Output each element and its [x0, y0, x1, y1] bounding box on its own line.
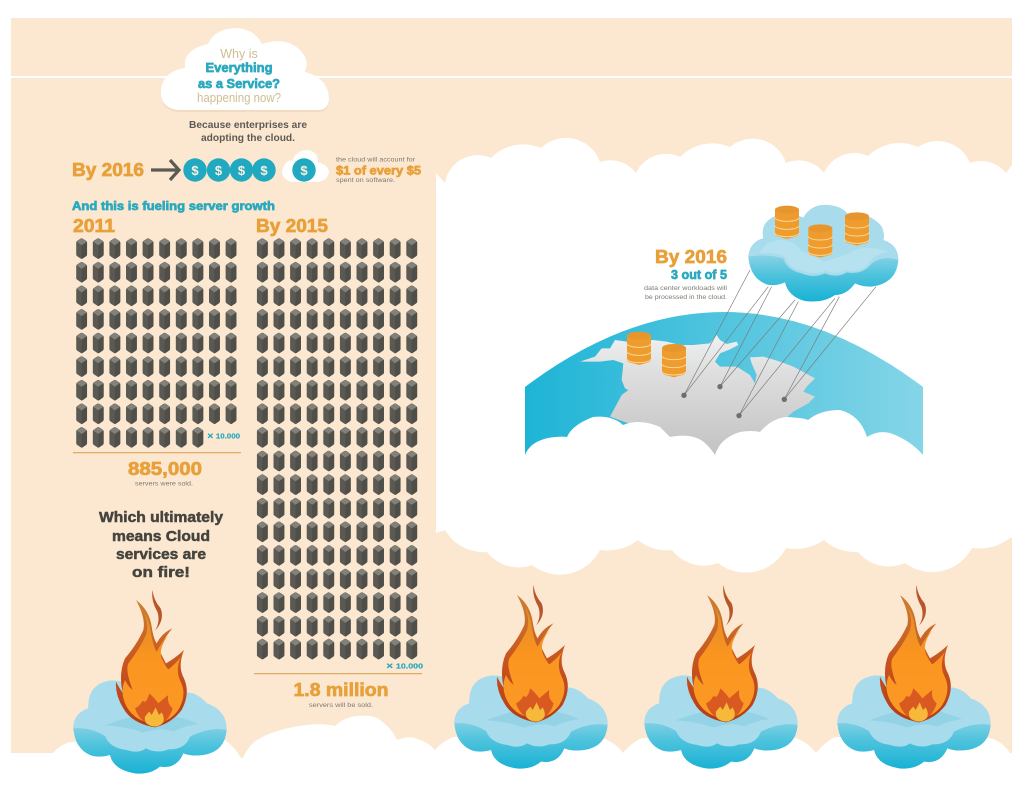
text: cloud services on fire: services are	[116, 546, 206, 563]
cloud share text: the cloud will account for	[336, 156, 416, 164]
icon: coins	[183, 158, 276, 182]
cloud share text	[336, 156, 421, 184]
server growth heading: And this is fueling server growth	[72, 199, 275, 213]
title text: Why is	[220, 47, 258, 61]
horizontal white band	[11, 76, 1012, 78]
text: cloud services on fire	[99, 509, 224, 581]
server stacks on map	[627, 332, 686, 377]
white clouds over globe	[525, 410, 923, 470]
text: workloads caption: data center workloads will	[644, 285, 728, 292]
globe illustration	[525, 270, 923, 470]
heading: 2011: 2011	[73, 216, 115, 236]
chart: 2015 servers	[257, 238, 417, 660]
connection lines	[684, 270, 876, 416]
cloud share text: $1 of every $5	[336, 164, 421, 178]
title text	[197, 47, 281, 105]
text: cloud services on fire: means Cloud	[112, 528, 210, 545]
icon: coins: $	[191, 163, 199, 178]
sky cloud with servers	[748, 205, 898, 301]
icon: cloud coin: $	[300, 163, 308, 178]
title text: Everything	[206, 60, 273, 75]
divider 2011	[73, 452, 241, 453]
panel: large white cloud	[436, 138, 1024, 575]
legend: 2015 multiplier: ✕ 10.000	[386, 662, 423, 670]
subtitle text: adopting the cloud.	[201, 132, 295, 144]
subtitle text: Because enterprises are	[189, 119, 307, 131]
text: By 2016: By 2016	[655, 247, 727, 267]
caption: servers will be sold: servers will be sold.	[309, 702, 373, 709]
globe dome	[525, 312, 923, 455]
text: workloads caption	[644, 285, 728, 301]
location dots	[681, 384, 787, 418]
icon: coins: $	[260, 163, 268, 178]
land map	[580, 335, 815, 455]
text: cloud services on fire: Which ultimately	[99, 509, 224, 526]
panel: bottom white clouds	[0, 716, 1024, 798]
icon: flame cloud 2	[454, 585, 608, 769]
divider 2015	[254, 673, 422, 674]
text: 3 out of 5: 3 out of 5	[671, 267, 727, 282]
By 2016 heading: By 2016	[72, 160, 144, 180]
icon: cloud coin	[282, 150, 329, 182]
icon: coins: $	[215, 163, 223, 178]
arrow	[151, 160, 179, 180]
icon: flame cloud 4	[837, 585, 991, 769]
cloud share text: spent on software.	[336, 177, 395, 184]
title text: as a Service?	[198, 76, 280, 91]
icon: flame cloud 3	[644, 585, 798, 769]
chart: 2011 servers	[76, 238, 236, 448]
title text: happening now?	[197, 90, 281, 105]
caption: servers were sold: servers were sold.	[135, 480, 193, 488]
stat: 1.8 million: 1.8 million	[294, 680, 388, 700]
stat: 885,000: 885,000	[128, 459, 202, 479]
legend: 2011 multiplier: ✕ 10.000	[207, 432, 240, 440]
text: workloads caption: be processed in the cloud.	[645, 294, 727, 301]
icon: coins: $	[238, 163, 246, 178]
icon: flame cloud 1	[73, 590, 227, 774]
text: cloud services on fire: on fire!	[132, 564, 190, 581]
title cloud	[161, 28, 329, 112]
subtitle text	[189, 119, 307, 144]
heading: By 2015: By 2015	[256, 216, 328, 236]
